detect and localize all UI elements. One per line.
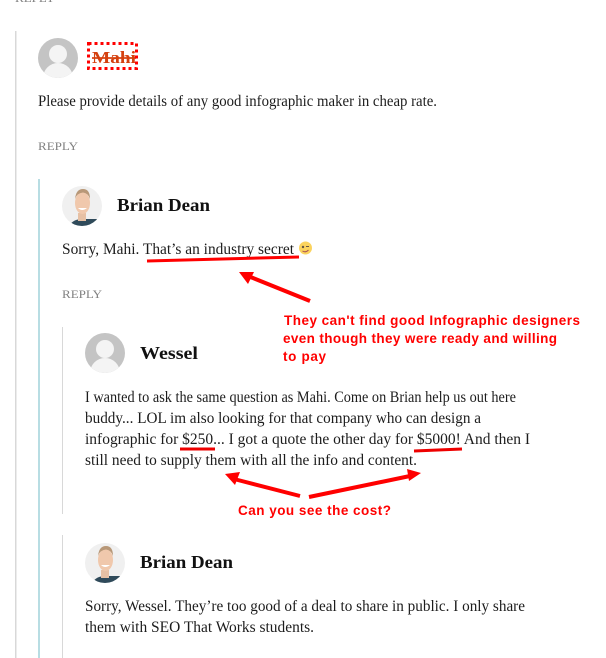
comment text: industry secret: Sorry, Mahi. That’s an industry secret (62, 241, 295, 258)
annotation: designers: even though they were ready and willing (283, 331, 557, 346)
reply link: REPLY (38, 141, 79, 153)
name: Mahi with dotted highlight (88, 44, 136, 68)
comment: Brian Dean 2 (85, 543, 525, 636)
comment text: Wessel: I wanted to ask the same question as Mahi. Come on Brian help us out here (85, 389, 516, 406)
reply link: REPLY (62, 289, 103, 301)
arrow: to $5000 (309, 469, 421, 497)
avatar: Brian Dean (85, 543, 125, 585)
name: Brian Dean: Brian Dean (140, 552, 233, 572)
annotation: designers (283, 313, 580, 364)
avatar: Brian Dean (62, 186, 102, 228)
comment: Mahi (38, 38, 437, 153)
name: Brian Dean: Brian Dean (117, 195, 210, 215)
avatar: Mahi placeholder (38, 38, 78, 78)
arrow: to industry secret (239, 272, 310, 301)
comment text: Wessel: buddy... LOL im also looking for that company who can design a (85, 410, 481, 427)
underline: $5000 (414, 449, 462, 451)
annotation: designers: They can't find good Infographic designers (284, 313, 580, 328)
annotation: cost: Can you see the cost? (238, 503, 391, 518)
comment text: Wessel: infographic for $250... I got a quote the other day for $5000! And then I (85, 431, 530, 448)
comment text: Brian reply (85, 598, 525, 636)
comment text: Wessel (85, 389, 530, 469)
icon: winking emoji (299, 242, 312, 254)
comment text: Brian reply: them with SEO That Works students. (85, 619, 314, 636)
underline: $250 (180, 448, 215, 450)
avatar: Wessel placeholder (85, 333, 125, 373)
underline: industry secret (147, 257, 299, 261)
name: Mahi with dotted highlight: Mahi (92, 48, 136, 67)
comment: Brian Dean 1 (62, 186, 312, 301)
comment text: Wessel: still need to supply them with all the info and content. (85, 452, 417, 469)
comment: Wessel (85, 333, 530, 469)
arrow: to $250 (225, 472, 300, 496)
comment text: Brian reply: Sorry, Wessel. They’re too good of a deal to share in public. I only share (85, 598, 525, 615)
annotation: designers: to pay (283, 349, 326, 364)
name: Wessel: Wessel (140, 343, 198, 363)
comment text: Mahi: Please provide details of any good infographic maker in cheap rate. (38, 93, 437, 110)
